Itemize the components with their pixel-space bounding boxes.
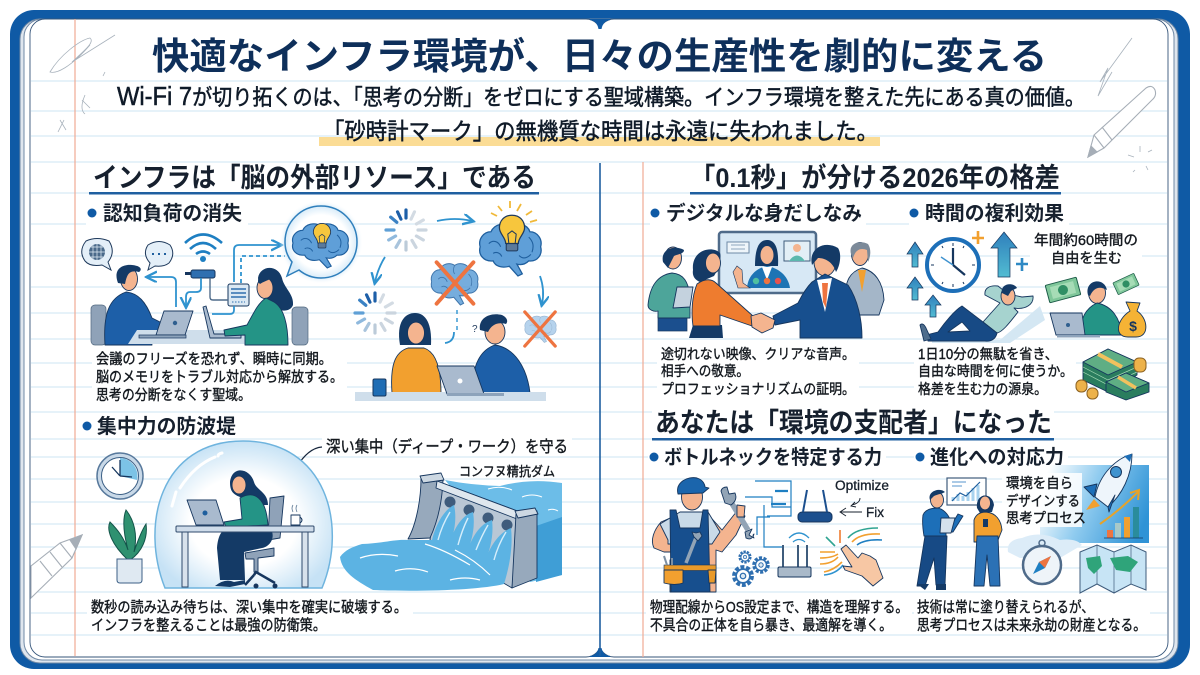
- bullet heading: compound time: 時間の複利効果: [925, 202, 1064, 225]
- icon: brain thought bubble: [279, 200, 363, 284]
- icon: small arrows: [840, 498, 862, 516]
- illustration: flow of thought interruption: [355, 201, 556, 401]
- text: digital grooming body: プロフェッショナリズムの証明。: [661, 381, 855, 398]
- label: dam garbled text: コンフヌ精抗ダム: [459, 464, 555, 479]
- text: compound time body: 1日10分の無駄を省き、: [918, 346, 1058, 363]
- diagram: network flow: [745, 481, 791, 547]
- text: seawall body: インフラを整えることは最強の防衛策。: [91, 617, 326, 634]
- bullet heading: bottleneck: ボトルネックを特定する力: [664, 446, 882, 469]
- person: man with laptop and money bag: $: [1129, 318, 1137, 334]
- icon: pencil bottom left: [31, 535, 82, 598]
- text: think process: [1002, 473, 1086, 527]
- illustration: technician and network: [652, 478, 889, 592]
- panel: right page 0.1 second gap: [646, 162, 1150, 634]
- illustration: compound time: [907, 231, 1146, 343]
- text: think process: 思考プロセス: [1006, 510, 1086, 526]
- doodle: scribble top left: [50, 35, 115, 132]
- person: man with tablet: [917, 490, 963, 590]
- icon: chart board: [947, 478, 986, 505]
- arrow: spinner down: [375, 257, 385, 282]
- text: evolution body: 技術は常に塗り替えられるが、: [917, 599, 1094, 616]
- callout: deep work: [296, 437, 572, 468]
- text: digital grooming body: 途切れない映像、クリアな音声。: [661, 345, 855, 363]
- text: digital grooming body: 相手への敬意。: [661, 363, 749, 380]
- subtitle: Wi-Fi 7が切り拓くのは、「思考の分断」をゼロにする聖域構築。インフラ環境を整えた先にある真の価値。: [117, 81, 1085, 111]
- text: digital grooming body: [657, 345, 859, 398]
- chart: rising bars: [1100, 490, 1143, 538]
- icon: small crossed brain: [525, 312, 556, 346]
- person: woman working: [176, 470, 314, 588]
- icon: clock: [927, 239, 979, 291]
- text: bottleneck body: 不具合の正体を自ら暴き、最適解を導く。: [650, 617, 892, 634]
- person: reclining man: [920, 284, 1045, 343]
- text: bottleneck body: [646, 598, 912, 634]
- swirl arrows: [820, 528, 882, 575]
- icon: brain with lit bulb: [480, 201, 541, 276]
- arrow: spinner to brain: [437, 219, 472, 221]
- label: fix: Fix: [866, 505, 884, 520]
- title: 快適なインフラ環境が、日々の生産性を劇的に変える: [152, 36, 1047, 77]
- person: man with laptop and money bag: [1050, 281, 1146, 338]
- person: technician: [652, 478, 754, 592]
- illustration: thinking process: [917, 454, 1149, 593]
- table and laptops: [128, 306, 260, 344]
- text: cognitive load body: 脳のメモリをトラブル対応から解放する。: [96, 368, 343, 386]
- icon: spinner top: [386, 210, 426, 250]
- text: cognitive load body: 会議のフリーズを恐れず、瞬時に同期。: [96, 350, 332, 368]
- text: 60 hours: 年間約60時間の: [1034, 232, 1138, 248]
- text: compound time body: 格差を生む力の源泉。: [918, 381, 1047, 398]
- icon: dashes and question: [445, 310, 478, 343]
- icon: map: [1080, 545, 1146, 593]
- person: man with laptop: [91, 265, 170, 345]
- text: compound time body: 自由な時間を何に使うか。: [918, 363, 1073, 380]
- icon: spinner lower: [355, 293, 395, 333]
- text: evolution body: [914, 598, 1150, 634]
- icon: chat bubble: [145, 242, 173, 270]
- illustration: two people on network: [82, 200, 363, 345]
- icon: gears: [734, 552, 768, 585]
- icon: rocket: [1084, 454, 1132, 512]
- panel: left page brain resource: [82, 163, 572, 634]
- icon: server: [228, 284, 249, 306]
- icon: crossed brain: [431, 262, 478, 305]
- bullet heading: evolution: 進化への対応力: [930, 446, 1064, 469]
- person: woman in orange shaking hands: [689, 249, 753, 338]
- bullet heading: concentration seawall: 集中力の防波堤: [97, 415, 236, 438]
- text: seawall body: 数秒の読み込み待ちは、深い集中を確実に破壊する。: [91, 599, 407, 616]
- screen: [719, 232, 816, 293]
- text: evolution body: 思考プロセスは未来永劫の財産となる。: [917, 617, 1146, 634]
- handshake: [751, 313, 775, 333]
- illustration: video call handshake: [648, 232, 884, 338]
- table mug and laptop: [355, 366, 546, 401]
- doodle: scribble top right: [1098, 38, 1152, 172]
- icons: up arrows and plus: [907, 231, 1028, 317]
- person: woman in orange: [392, 313, 441, 393]
- icon: dashes and question: ?: [472, 324, 478, 335]
- person: woman in orange: [974, 496, 1002, 586]
- icon: pointing hand: [841, 545, 883, 586]
- icon: large wrench: [728, 497, 748, 530]
- text: compound time body: [914, 345, 1076, 398]
- highlighted subtitle: 「砂時計マーク」の無機質な時間は永遠に失われました。: [323, 118, 878, 144]
- arrow: brain down: [540, 276, 543, 304]
- person: man in blue: [472, 314, 530, 393]
- bullet heading: cognitive load: 認知負荷の消失: [103, 202, 242, 225]
- icon: router: [185, 270, 215, 278]
- text: think process: デザインする: [1006, 493, 1080, 509]
- illustration: dam and water: [340, 473, 562, 591]
- label: optimize: Optimize: [835, 478, 889, 493]
- text: cognitive load body: [92, 350, 347, 404]
- person: man with tablet: [648, 247, 693, 331]
- text: bottleneck body: 物理配線からOS設定まで、構造を理解する。: [650, 599, 908, 616]
- text: seawall body: [87, 598, 413, 634]
- person: man in navy suit: [773, 245, 862, 338]
- icon: flying money: [1045, 273, 1139, 303]
- icon: pencil top right: [1088, 86, 1156, 157]
- illustration: protective dome: [155, 441, 332, 588]
- icon: wifi router bottom: [778, 533, 811, 577]
- icon: plant: [109, 510, 146, 583]
- panel: sky background: [1040, 465, 1149, 543]
- text: think process: 環境を自ら: [1006, 475, 1073, 491]
- heading: 2026 gap: 「0.1秒」が分ける2026年の格差: [690, 162, 1060, 193]
- callout: deep work: 深い集中（ディープ・ワーク）を守る: [326, 437, 568, 456]
- network arrows: [148, 245, 285, 314]
- bullet heading: digital grooming: デジタルな身だしなみ: [666, 201, 862, 225]
- icon: globe bubble: [82, 238, 112, 270]
- heading: brain external resource: インフラは「脳の外部リソース」である: [93, 163, 536, 193]
- heading: ruler of environment: あなたは「環境の支配者」になった: [655, 408, 1052, 438]
- icon: compass: [1023, 540, 1061, 584]
- desk: [176, 526, 314, 587]
- icon: wall clock: [97, 453, 143, 499]
- icon: clouds: [1008, 534, 1082, 558]
- text: cognitive load body: 思考の分断をなくす聖域。: [96, 387, 251, 404]
- icon: money stacks and coins: [1076, 349, 1149, 400]
- icon: wifi: [185, 234, 222, 262]
- person: woman with laptop: [224, 268, 308, 345]
- person: gray suit man: [845, 242, 884, 315]
- icon: router with antennas top: [798, 490, 832, 522]
- text: 60 hours: [1030, 231, 1142, 266]
- text: 60 hours: 自由を生む: [1051, 250, 1122, 266]
